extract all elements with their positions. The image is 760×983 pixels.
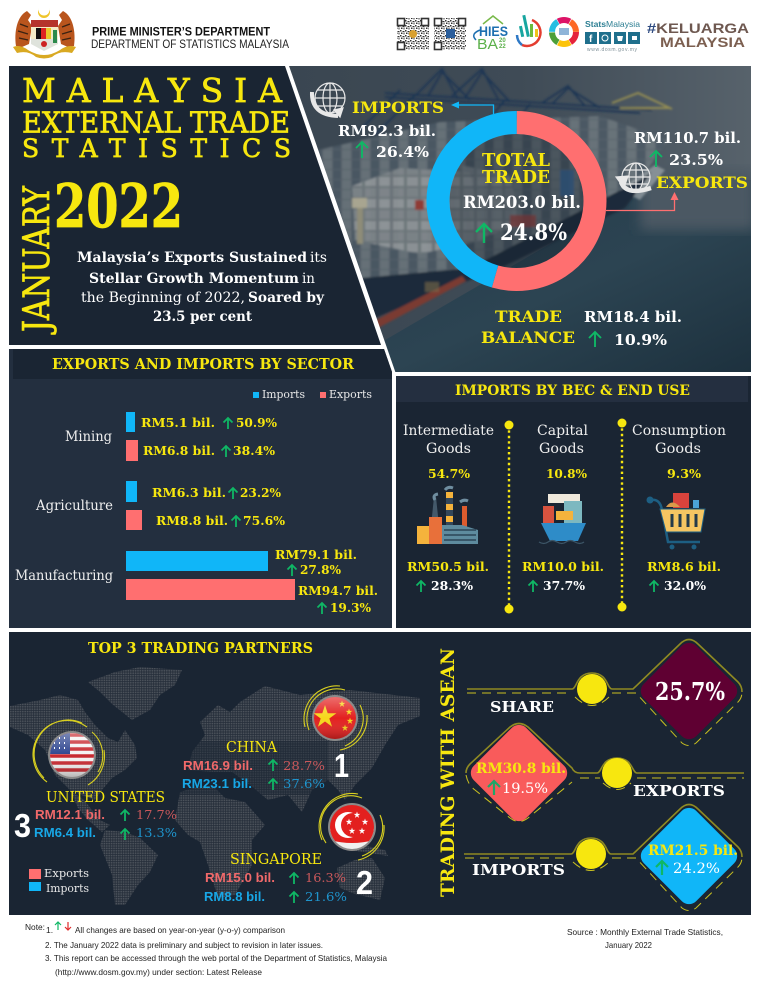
column: consumption goods: 32.0% [664, 578, 706, 593]
heading: total trade: TOTAL [482, 150, 550, 171]
callout: trade balance: RM18.4 bil. [584, 309, 682, 326]
callout: trade balance: TRADE [495, 307, 562, 326]
column: intermediate goods: RM50.5 bil. [407, 559, 489, 574]
divider: dotted line 1 [504, 420, 514, 614]
chart: mining: 38.4% [233, 443, 275, 458]
icon: China flag [304, 686, 367, 750]
column: consumption goods: Goods [655, 441, 701, 457]
logo: HIES BA 2022: BA [477, 36, 498, 53]
chart: agriculture: 75.6% [243, 513, 285, 528]
column: capital goods: 10.8% [546, 466, 587, 481]
chart: manufacturing: Manufacturing [15, 568, 113, 584]
partner: Singapore: 16.3% [305, 870, 346, 885]
chart: manufacturing: 27.8% [300, 562, 341, 577]
column: consumption goods: RM8.6 bil. [647, 559, 721, 574]
callout: trade balance: BALANCE [481, 328, 575, 347]
column: intermediate goods [403, 423, 494, 593]
legend: Imports [262, 388, 305, 401]
text block: source: January 2022 [605, 940, 652, 950]
icon: USA flag [33, 720, 105, 785]
arrow: exports connector [606, 192, 678, 210]
column: consumption goods [632, 423, 726, 593]
panel: imports by BEC and end use [396, 376, 751, 628]
partner: Singapore: RM8.8 bil. [204, 889, 265, 904]
row: ASEAN imports: 24.2% [673, 861, 720, 877]
partner: China: CHINA [226, 740, 277, 756]
partner: China: 1 [334, 747, 349, 784]
text block: summary: Soared by [248, 290, 325, 306]
chart: manufacturing: 19.3% [330, 600, 371, 615]
column: consumption goods: 9.3% [667, 466, 701, 481]
row: ASEAN exports [466, 721, 744, 825]
partner: China: 28.7% [283, 758, 325, 773]
legend: partners: Exports [44, 866, 89, 880]
partner: Singapore: 21.6% [305, 889, 347, 904]
logo: Keluarga Malaysia [647, 20, 749, 50]
logo: HIES BA 2022: HIES [479, 23, 508, 39]
partner: Singapore [204, 793, 384, 904]
legend: Exports [329, 388, 372, 401]
callout: trade balance [481, 307, 682, 349]
heading: top 3 trading partners: TOP 3 TRADING PARTNERS [88, 640, 313, 657]
heading: Malaysia External Trade Statistics: EXTERNAL TRADE [22, 106, 290, 140]
chart: mining: Mining [65, 429, 112, 445]
overlay: darker plate behind China text [180, 741, 328, 795]
text block: summary: 23.5 per cent [153, 309, 253, 325]
row: ASEAN share: 25.7% [655, 677, 725, 706]
heading: trading with ASEAN: TRADING WITH ASEAN [437, 648, 459, 897]
partner: United States: UNITED STATES [46, 790, 165, 806]
text block: notes: All changes are based on year-on-year (y-o-y) comparison [75, 925, 285, 935]
icon: up and down arrows [55, 922, 71, 930]
heading: EXPORTS AND IMPORTS BY SECTOR [52, 356, 355, 373]
callout: exports [634, 130, 748, 192]
row: ASEAN imports: RM21.5 bil. [648, 843, 738, 859]
row: ASEAN exports: 19.5% [502, 781, 548, 797]
chart: agriculture: 23.2% [240, 485, 281, 500]
chart: manufacturing [15, 547, 378, 615]
partner: United States: RM12.1 bil. [35, 807, 105, 822]
column: capital goods: Capital [537, 423, 588, 439]
callout: trade balance: 10.9% [614, 331, 667, 349]
icon: QR code facebook [434, 18, 466, 50]
icon: shopping cart [646, 493, 705, 550]
text block: notes [25, 922, 387, 977]
logo: Keluarga Malaysia: MALAYSIA [660, 34, 745, 50]
chart: agriculture: RM6.3 bil. [152, 485, 226, 500]
partner: China: 37.6% [283, 776, 325, 791]
row: ASEAN share [467, 639, 742, 746]
column: capital goods [522, 423, 604, 593]
chart: mining: RM6.8 bil. [143, 443, 215, 458]
text: total trade growth: 24.8% [500, 220, 567, 246]
partner: China: RM23.1 bil. [182, 776, 252, 791]
photo: container ship at port [280, 66, 760, 376]
chart: mining: RM5.1 bil. [141, 415, 215, 430]
callout: imports: RM92.3 bil. [338, 123, 436, 140]
icon: imports globe [312, 83, 345, 117]
heading: Malaysia External Trade Statistics [22, 71, 291, 163]
heading: Malaysia External Trade Statistics: MALAYSIA [22, 71, 283, 110]
heading: total trade: TRADE [482, 167, 550, 188]
heading: Malaysia External Trade Statistics: STATISTICS [22, 134, 291, 163]
partner: China [182, 686, 367, 791]
text: total trade value: RM203.0 bil. [463, 193, 581, 213]
heading: 2022: 2022 [54, 172, 183, 242]
column: intermediate goods: Intermediate [403, 423, 494, 439]
arrow: imports connector [451, 102, 494, 114]
partner: United States: 17.7% [136, 807, 177, 822]
logo: coat of arms [13, 4, 76, 58]
text block: notes: 3. This report can be accessed through the web portal of the Department of Statistics, Malaysia [45, 953, 387, 963]
text block: summary: in [302, 271, 315, 287]
column: intermediate goods: 54.7% [428, 466, 470, 481]
heading: total trade [482, 150, 550, 188]
icon: up arrow [476, 224, 492, 243]
header: department names [91, 26, 289, 51]
logo: Keluarga Malaysia: #KELUARGA [647, 20, 749, 36]
panel: bottom background [9, 632, 751, 915]
chart: agriculture [35, 481, 285, 530]
text block: summary: its [310, 250, 327, 266]
icon: exports globe [616, 163, 651, 191]
heading: January: JANUARY [17, 185, 58, 335]
chart: manufacturing: RM79.1 bil. [275, 547, 357, 562]
chart: mining: 50.9% [236, 415, 277, 430]
row: ASEAN imports [464, 804, 742, 910]
text block: summary: the Beginning of 2022, [81, 290, 245, 306]
partner: United States: RM6.4 bil. [34, 825, 96, 840]
partner: Singapore: SINGAPORE [230, 852, 322, 868]
partner: Singapore: RM15.0 bil. [205, 870, 275, 885]
column: intermediate goods: 28.3% [431, 578, 473, 593]
icon: QR code portal [397, 18, 429, 50]
header: department names: DEPARTMENT OF STATISTICS MALAYSIA [91, 39, 289, 51]
column: capital goods: Goods [539, 441, 584, 457]
partner: United States [14, 720, 177, 844]
text block: notes: 1. [46, 925, 53, 935]
panel: title [9, 66, 381, 345]
logo: SDG wheel [552, 20, 576, 44]
partner: United States: 13.3% [136, 825, 177, 840]
callout: exports: 23.5% [669, 151, 723, 169]
text block: notes: (http://www.dosm.gov.my) under section: Latest Release [55, 967, 262, 977]
column: intermediate goods: Goods [426, 441, 471, 457]
column: consumption goods: Consumption [632, 423, 726, 439]
heading band [13, 349, 392, 379]
partner: United States: 3 [14, 807, 31, 844]
text block: source [567, 927, 723, 950]
text block: notes: Note: [25, 922, 45, 932]
divider: dotted line 2 [618, 418, 626, 612]
logo: HIES BA 2022: 22 [499, 44, 506, 50]
chart: manufacturing: RM94.7 bil. [298, 583, 378, 598]
callout: exports: RM110.7 bil. [634, 130, 741, 147]
header: department names: PRIME MINISTER’S DEPARTMENT [92, 26, 270, 38]
legend: partners: Imports [46, 881, 89, 895]
logo: StatsMalaysia social media: StatsMalaysia [585, 19, 640, 29]
chart: agriculture: RM8.8 bil. [156, 513, 228, 528]
logo: StatsMalaysia social media: f [589, 34, 593, 45]
text block: summary: Stellar Growth Momentum [89, 271, 299, 287]
callout: imports: 26.4% [376, 143, 429, 161]
chart: total trade donut [438, 122, 595, 279]
column: capital goods: RM10.0 bil. [522, 559, 604, 574]
chart: mining [65, 412, 277, 461]
text block: summary: Malaysia’s Exports Sustained [77, 250, 307, 266]
heading: IMPORTS BY BEC & END USE [455, 383, 690, 399]
partner: Singapore: 2 [356, 864, 373, 901]
text block: summary [77, 250, 327, 325]
text block: notes: 2. The January 2022 data is preliminary and subject to revision in later issues. [45, 940, 323, 950]
legend: partners [29, 866, 89, 895]
logo: HIES BA 2022 [474, 16, 508, 53]
column: capital goods: 37.7% [543, 578, 585, 593]
logo: StatsMalaysia social media [585, 19, 640, 53]
logo: census chart circle [517, 15, 540, 46]
panel: exports and imports by sector [9, 349, 392, 628]
callout: imports: IMPORTS [352, 98, 444, 117]
icon: cargo ship [539, 494, 586, 544]
text block: source: Source : Monthly External Trade Statistics, [567, 927, 723, 937]
heading band [396, 376, 748, 402]
logo: StatsMalaysia social media: www.dosm.gov.my [587, 47, 638, 53]
icon: factory [417, 487, 478, 544]
map: world map [10, 667, 420, 905]
logo: HIES BA 2022: 20 [499, 38, 506, 44]
row: ASEAN imports: IMPORTS [472, 861, 565, 879]
chart: agriculture: Agriculture [35, 498, 113, 514]
row: ASEAN exports: RM30.8 bil. [476, 761, 566, 777]
line: white diagonal divider [287, 65, 394, 373]
callout: imports [338, 98, 444, 161]
legend [253, 388, 372, 401]
icon: Singapore flag [319, 793, 384, 860]
row: ASEAN exports: EXPORTS [633, 782, 725, 800]
row: ASEAN share: SHARE [490, 698, 554, 716]
callout: exports: EXPORTS [656, 173, 748, 192]
partner: China: RM16.9 bil. [183, 758, 253, 773]
